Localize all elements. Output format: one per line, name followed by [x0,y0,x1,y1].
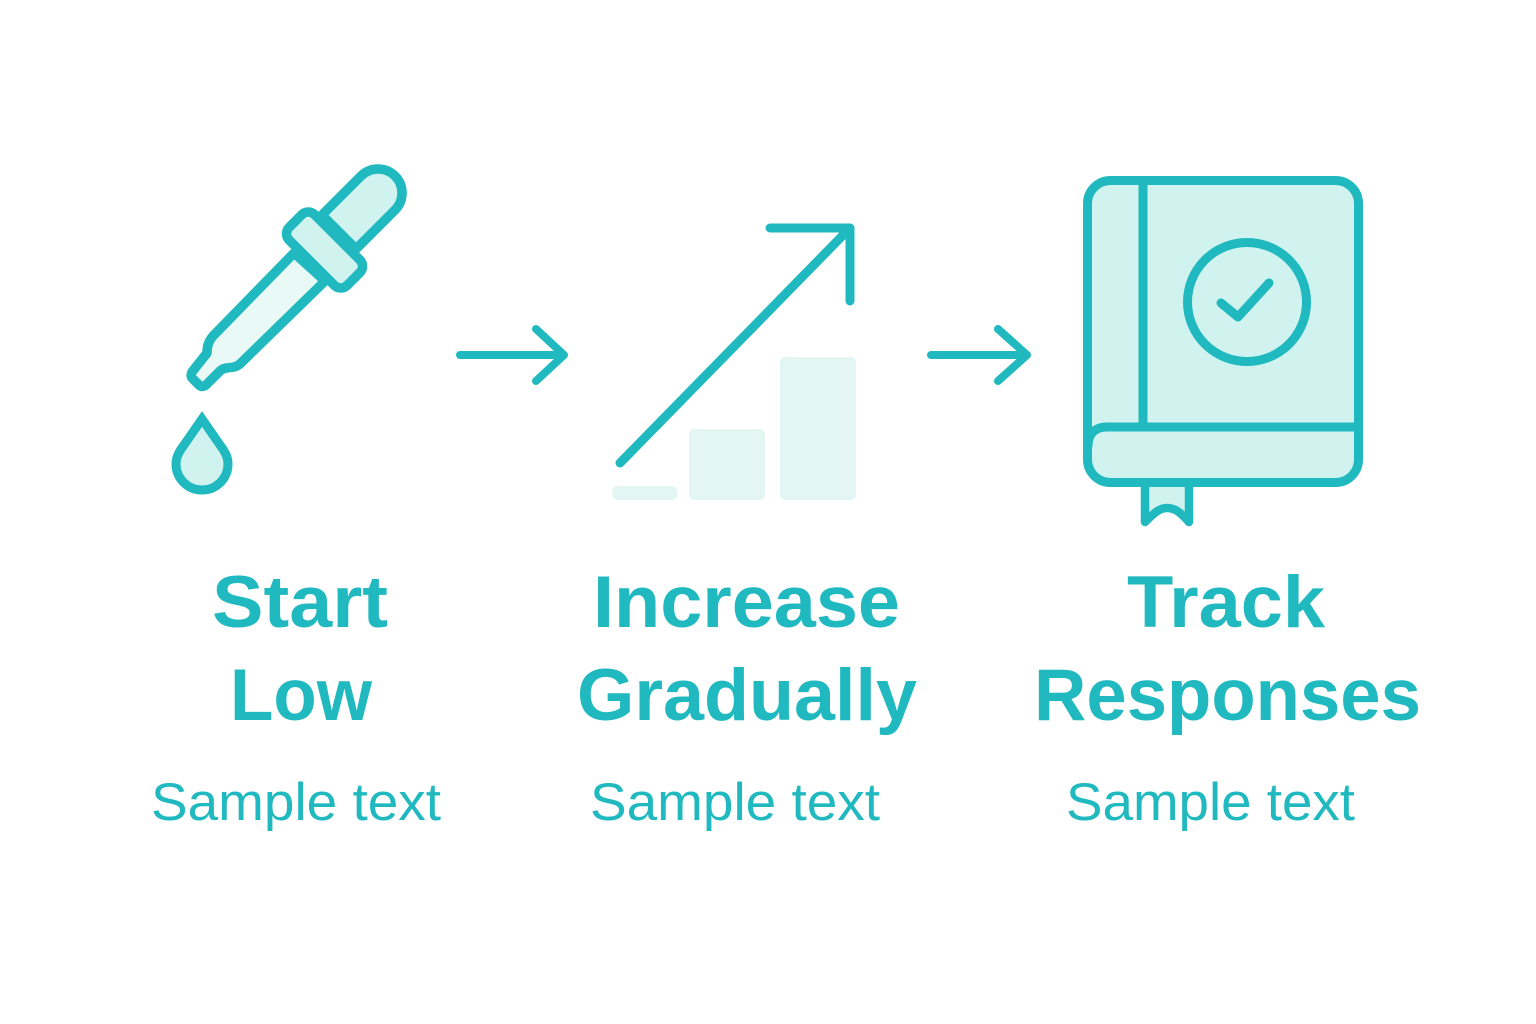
icon: dropper and drop [176,169,402,490]
check mark [1221,283,1269,317]
dropper bulb [322,169,402,249]
step 2 heading: Gradually [577,655,917,736]
dropper collar [283,208,366,292]
step 1 heading: Start [212,562,388,643]
step 3 text: Sample text [1066,773,1355,832]
book bottom band [1088,427,1358,446]
book cover [1088,180,1358,482]
bar: small [612,486,678,500]
rising arrow [620,228,850,463]
arrow: step two to step three [931,329,1027,381]
book spine [1138,181,1148,423]
step 3 heading: Track [1127,562,1325,643]
arrow: step one to step two [460,329,564,381]
dropper barrel [191,253,325,386]
step 2 heading: Increase [593,562,900,643]
icon: rising arrow with bars [612,228,856,500]
check circle [1188,242,1306,362]
icon: journal with check mark [1088,180,1358,522]
step 1 text: Sample text [151,773,441,832]
step 2 text: Sample text [590,773,880,832]
bookmark ribbon [1145,487,1189,522]
water drop [176,419,228,490]
step 3 heading: Responses [1034,655,1421,736]
step 1 heading: Low [230,655,372,736]
bar: tall [780,357,856,500]
bar: medium [689,429,765,500]
